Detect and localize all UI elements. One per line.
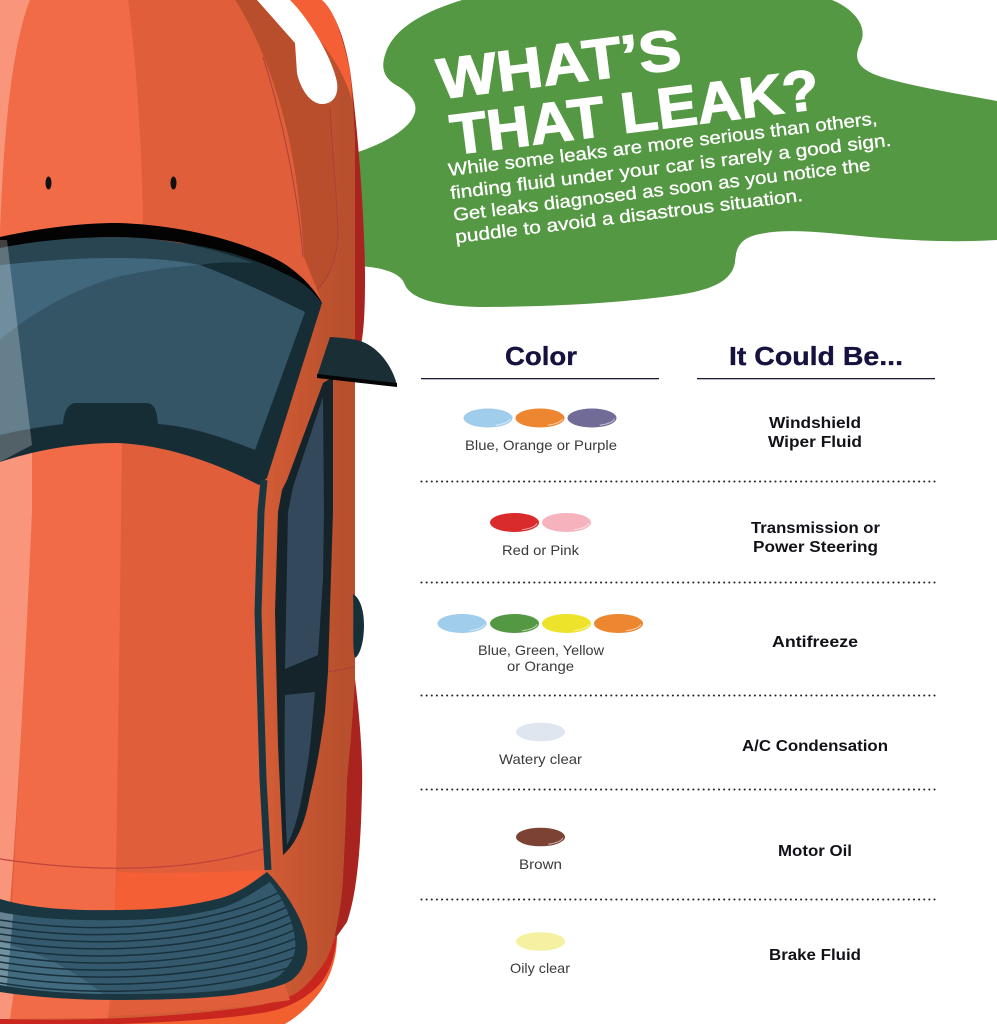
intro paragraph: Get leaks diagnosed as soon as you notice the xyxy=(452,155,871,225)
washer nozzles xyxy=(46,176,176,190)
windshield reflection xyxy=(0,240,32,462)
green puddle header xyxy=(340,0,997,307)
row: motor oil: Motor Oil xyxy=(778,843,852,860)
intro paragraph: finding fluid under your car is rarely a good sign. xyxy=(449,130,892,203)
roof xyxy=(0,437,268,907)
swatch: watery clear xyxy=(516,723,565,741)
swatches: red, pink xyxy=(490,513,591,532)
row: transmission or power steering: Power Steering xyxy=(753,539,878,556)
bright orange rear panel xyxy=(115,870,266,910)
rear side glass xyxy=(285,692,315,845)
rear window frame xyxy=(0,872,307,1000)
rear window glass and louvres xyxy=(0,882,296,994)
table: column headers: Color xyxy=(505,341,577,371)
car illustration xyxy=(0,0,397,1024)
row: motor oil xyxy=(516,828,852,872)
intro paragraph: puddle to avoid a disastrous situation. xyxy=(454,185,804,247)
title: WHAT’S xyxy=(434,18,685,112)
row: transmission or power steering: Red or Pink xyxy=(502,542,580,558)
row: windshield wiper fluid: Blue, Orange or Purple xyxy=(465,437,617,453)
row: antifreeze: Blue, Green, Yellow xyxy=(478,642,605,658)
car outer red shell xyxy=(200,0,365,960)
front side glass xyxy=(285,397,324,669)
row: antifreeze: or Orange xyxy=(507,658,574,674)
intro paragraph: While some leaks are more serious than others, xyxy=(447,108,878,180)
row: transmission or power steering xyxy=(490,513,880,558)
roof rail xyxy=(258,480,268,870)
row: brake fluid: Oily clear xyxy=(510,960,570,976)
windshield highlight xyxy=(0,258,200,340)
swatches: blue, orange, purple xyxy=(464,408,616,428)
hood xyxy=(0,0,322,305)
intro paragraph xyxy=(447,108,892,247)
bright rear outer edge xyxy=(0,936,337,1024)
windshield frame xyxy=(0,240,322,485)
red rear band xyxy=(0,936,337,1024)
row: A/C condensation xyxy=(499,723,888,767)
roof seam line xyxy=(0,849,263,868)
row: windshield wiper fluid: Windshield xyxy=(769,415,861,432)
side window frame xyxy=(275,377,333,855)
table: column headers: It Could Be... xyxy=(729,341,903,371)
windshield frame upper band xyxy=(0,237,253,265)
hood pale band xyxy=(0,0,30,233)
row: transmission or power steering: Transmission or xyxy=(751,520,880,537)
hood crease lines xyxy=(263,57,355,672)
side mirror xyxy=(317,337,397,387)
row: brake fluid xyxy=(510,932,861,976)
title xyxy=(434,1,823,168)
row: A/C condensation: Watery clear xyxy=(499,751,582,767)
hood light band xyxy=(0,0,143,250)
swatch: oily clear xyxy=(516,932,565,951)
row: windshield wiper fluid: Wiper Fluid xyxy=(768,434,862,451)
swatches: blue, green, yellow, orange xyxy=(438,614,643,633)
rear deck xyxy=(0,980,290,1019)
hood side panel xyxy=(235,0,338,290)
windshield glass xyxy=(0,258,305,450)
bright top fender xyxy=(288,0,352,100)
swatch: brown xyxy=(516,828,565,846)
row: antifreeze: Antifreeze xyxy=(772,634,858,651)
windshield top seal xyxy=(0,223,322,303)
car body side xyxy=(0,0,355,1020)
row: antifreeze xyxy=(438,614,858,674)
table: column headers xyxy=(421,341,935,379)
white cutout wheel arch xyxy=(257,0,337,104)
row: A/C condensation: A/C Condensation xyxy=(742,738,888,755)
row: brake fluid: Brake Fluid xyxy=(769,947,861,964)
door handle xyxy=(353,594,364,658)
row: windshield wiper fluid xyxy=(464,408,862,453)
row: motor oil: Brown xyxy=(519,856,562,872)
title: THAT LEAK? xyxy=(447,58,823,168)
